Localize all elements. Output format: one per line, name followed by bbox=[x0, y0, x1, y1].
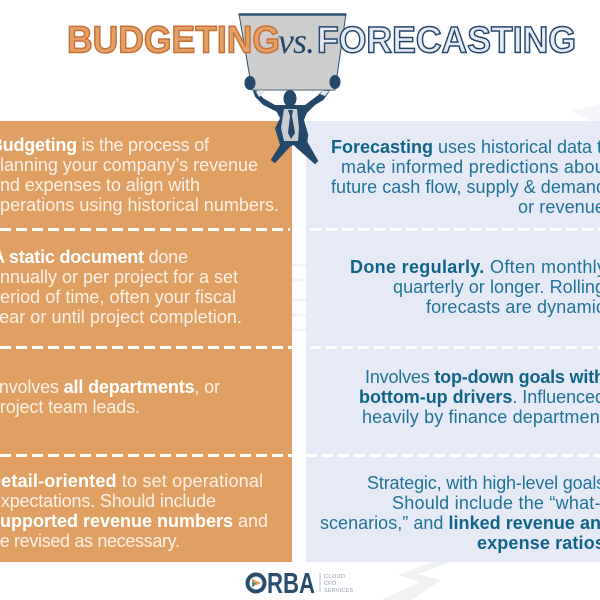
budgeting involvement text: Involves all departments, or bbox=[0, 377, 220, 397]
logo: ORBA cloud CFO services: CFO bbox=[324, 581, 337, 587]
logo: ORBA cloud CFO services: SERVICES bbox=[324, 588, 353, 594]
budgeting timing text bbox=[0, 247, 242, 327]
forecasting timing text bbox=[350, 257, 600, 317]
title: budgeting: BUDGETING bbox=[67, 20, 280, 62]
forecasting involvement text: bottom-up drivers. Influenced bbox=[359, 387, 600, 407]
figure bbox=[244, 75, 340, 164]
forecasting timing text: quarterly or longer. Rolling bbox=[393, 277, 600, 297]
budgeting detail text bbox=[0, 471, 268, 551]
forecasting involvement text: Involves top-down goals with bbox=[365, 367, 600, 387]
sign board bbox=[239, 14, 346, 90]
title bbox=[67, 20, 576, 62]
title: vs: vs. bbox=[278, 21, 315, 61]
budgeting involvement text bbox=[0, 377, 220, 417]
forecasting detail text bbox=[320, 473, 600, 553]
logo: ORBA cloud CFO services: CLOUD bbox=[324, 574, 345, 580]
icon: businessman holding up sign bbox=[239, 14, 346, 164]
forecasting involvement text bbox=[359, 367, 600, 427]
panel: forecasting bbox=[306, 121, 600, 562]
logo: ORBA cloud CFO services: RBA bbox=[267, 568, 315, 600]
forecasting definition text bbox=[331, 137, 600, 217]
panel: budgeting bbox=[0, 121, 292, 562]
logo: ORBA cloud CFO services bbox=[248, 568, 353, 600]
budgeting definition text bbox=[0, 135, 279, 215]
title: forecasting: FORECASTING bbox=[317, 20, 576, 60]
background zigzag arrow bbox=[292, 104, 600, 600]
